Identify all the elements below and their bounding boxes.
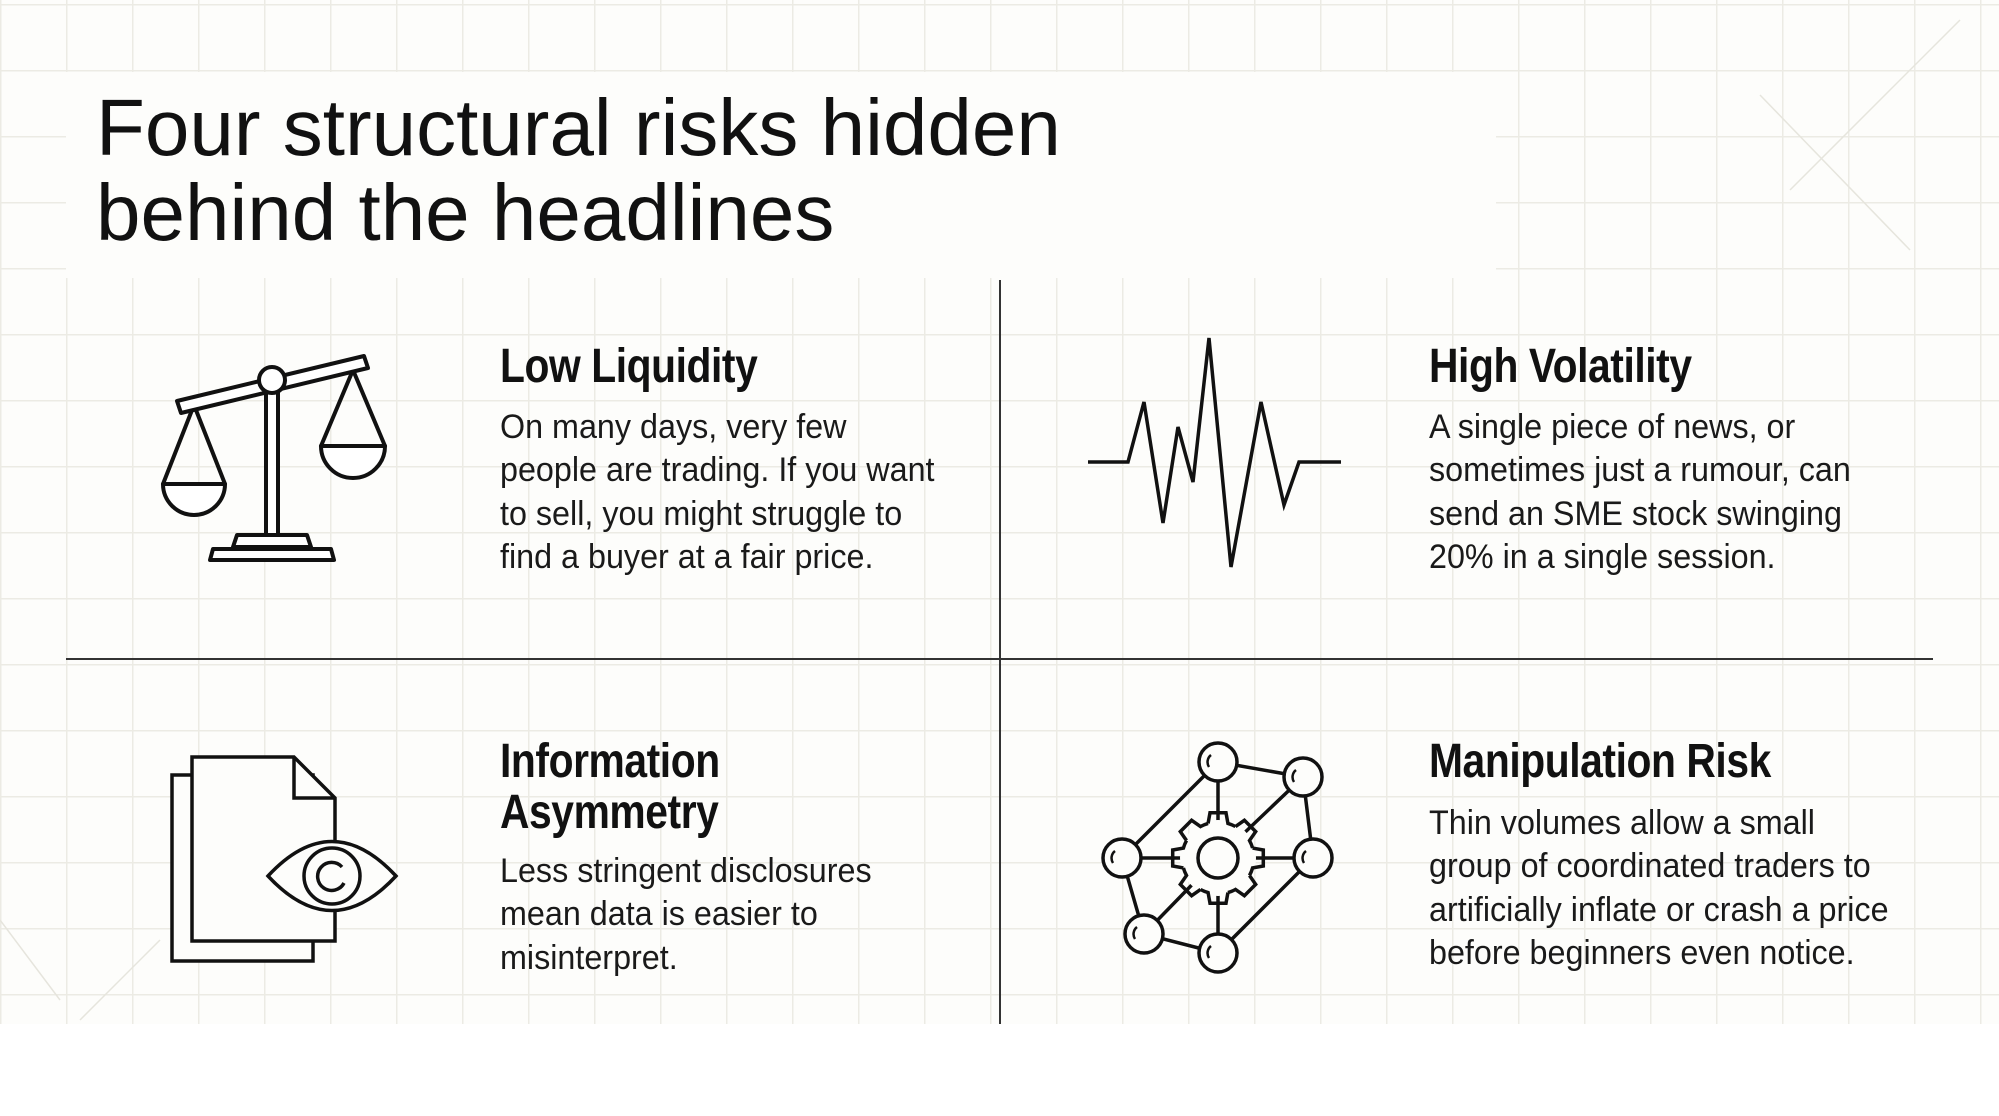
icon: network with gear [1101, 741, 1334, 974]
divider lines [999, 280, 1001, 1024]
panel: information asymmetry [170, 735, 872, 977]
heading [500, 735, 720, 839]
icon: document with eye [170, 755, 398, 963]
icon: waveform [1088, 338, 1341, 568]
body text: misinterpret. [500, 939, 678, 977]
body text [500, 408, 935, 576]
body text: group of coordinated traders to [1429, 847, 1871, 885]
body text: mean data is easier to [500, 895, 818, 933]
body text: before beginners even notice. [1429, 934, 1855, 972]
body text: send an SME stock swinging [1429, 495, 1842, 533]
body text [1429, 804, 1889, 972]
title: behind the headlines [96, 168, 834, 257]
panel: high volatility [1088, 338, 1851, 576]
icon: balance scale [160, 354, 388, 562]
body text: A single piece of news, or [1429, 408, 1795, 446]
title: Four structural risks hidden [96, 83, 1061, 172]
body text: find a buyer at a fair price. [500, 538, 873, 576]
panel: manipulation risk [1101, 735, 1889, 974]
body text [500, 852, 872, 977]
body text: On many days, very few [500, 408, 846, 446]
body text: sometimes just a rumour, can [1429, 451, 1851, 489]
heading: High Volatility [1429, 340, 1692, 393]
body text: to sell, you might struggle to [500, 495, 902, 533]
body text: people are trading. If you want [500, 451, 935, 489]
body text: Thin volumes allow a small [1429, 804, 1815, 842]
body text: Less stringent disclosures [500, 852, 872, 890]
heading: Information [500, 735, 720, 788]
body text: artificially inflate or crash a price [1429, 891, 1889, 929]
heading: Manipulation Risk [1429, 735, 1771, 788]
body text: 20% in a single session. [1429, 538, 1776, 576]
body text [1429, 408, 1851, 576]
title [96, 83, 1061, 257]
heading: Low Liquidity [500, 340, 757, 393]
panel: low liquidity [160, 340, 935, 576]
heading: Asymmetry [500, 786, 718, 839]
